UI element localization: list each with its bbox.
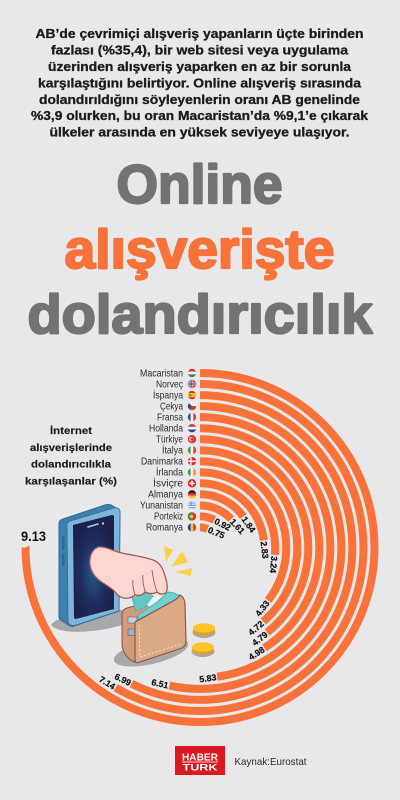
value labels: 2.83 bbox=[259, 541, 270, 559]
flag: Italy bbox=[188, 446, 196, 454]
intro text block: %3,9 olurken, bu oran Macaristan’da %9,1’e çıkarak bbox=[31, 109, 369, 123]
icon: wallet back and money bbox=[122, 592, 186, 662]
icon: sparkles bbox=[164, 546, 192, 576]
title bbox=[28, 153, 373, 345]
value labels: 6.99 bbox=[113, 671, 133, 688]
phone shadow bbox=[51, 609, 122, 632]
flag: Czechia bbox=[188, 402, 196, 410]
title: dolandırıcılık bbox=[28, 283, 373, 345]
country labels: Türkiye bbox=[156, 434, 183, 446]
country labels: İtalya bbox=[162, 446, 183, 456]
country labels: Hollanda bbox=[149, 423, 183, 434]
intro text block: fazlası (%35,4), bir web sitesi veya uygulama bbox=[51, 44, 349, 58]
title: Online bbox=[116, 153, 282, 215]
country labels: Portekiz bbox=[154, 512, 183, 523]
flag: Spain bbox=[188, 390, 196, 400]
radial bar chart bbox=[26, 373, 374, 722]
country labels: Macaristan bbox=[140, 368, 183, 379]
intro text block: ülkeler arasında en yüksek seviyeye ulaşıyor. bbox=[50, 126, 350, 140]
flag: France bbox=[188, 413, 196, 422]
flag: Greece bbox=[188, 501, 196, 510]
logo: Haber Türk: HABER bbox=[182, 752, 219, 764]
country labels bbox=[140, 368, 184, 534]
country labels: Yunanistan bbox=[140, 501, 183, 512]
value labels: 1.61 bbox=[228, 517, 247, 536]
title: alışverişte bbox=[64, 218, 334, 280]
flag: Hungary bbox=[188, 368, 196, 378]
flags bbox=[188, 368, 196, 532]
value labels: 7.14 bbox=[97, 674, 117, 692]
top value 9.13: 9.13 bbox=[21, 528, 46, 544]
country labels: Fransa bbox=[157, 412, 183, 423]
chart caption: İnternet bbox=[50, 424, 93, 437]
chart caption: alışverişlerinde bbox=[30, 443, 112, 454]
value labels: 0.92 bbox=[213, 516, 233, 533]
icon: phone bbox=[59, 504, 120, 626]
value labels: 3.24 bbox=[268, 556, 279, 574]
flag: Switzerland bbox=[188, 479, 196, 488]
value labels: 4.72 bbox=[246, 619, 266, 637]
source: Kaynak:Eurostat bbox=[234, 756, 307, 768]
logo: Haber Türk bbox=[175, 746, 225, 775]
value labels bbox=[97, 515, 279, 692]
chart caption: dolandırıcılıkla bbox=[31, 460, 111, 470]
value labels: 1.84 bbox=[240, 515, 258, 534]
illustration: phone and wallet bbox=[51, 504, 216, 672]
intro text block: üzerinden alışveriş yaparken en az bir sorunla bbox=[48, 60, 352, 74]
country labels: İsviçre bbox=[153, 479, 184, 490]
country labels: İspanya bbox=[153, 390, 183, 401]
flag: Portugal bbox=[188, 512, 196, 521]
intro text block: AB’de çevrimiçi alışveriş yapanların üçte birinden bbox=[36, 27, 364, 41]
value labels: 0.75 bbox=[207, 525, 226, 541]
value labels: 4.79 bbox=[250, 629, 270, 648]
country labels: Almanya bbox=[148, 490, 183, 501]
icon: wallet front bbox=[135, 592, 186, 663]
country labels: İrlanda bbox=[156, 468, 183, 479]
flag: Romania bbox=[188, 523, 196, 532]
flag: Norway bbox=[188, 380, 196, 388]
country labels: Çekya bbox=[160, 401, 183, 412]
country labels: Danimarka bbox=[141, 456, 183, 468]
country labels: Romanya bbox=[146, 523, 183, 534]
intro text block bbox=[31, 27, 369, 140]
chart caption: karşılaşanlar (%) bbox=[25, 476, 117, 488]
intro text block: dolandırıldığını söyleyenlerin oranı AB genelinde bbox=[39, 93, 360, 107]
intro text block: karşılaştığını belirtiyor. Online alışveriş sırasında bbox=[38, 76, 362, 90]
value labels: 4.33 bbox=[253, 598, 272, 618]
flag: Ireland bbox=[188, 468, 196, 476]
value labels: 6.51 bbox=[151, 677, 170, 691]
country labels: Norveç bbox=[156, 379, 183, 390]
logo: Haber Türk: TURK bbox=[182, 762, 218, 772]
icon: hand bbox=[90, 547, 167, 598]
value labels: 5.83 bbox=[199, 672, 217, 684]
icon: coins bbox=[192, 623, 216, 657]
flag: Germany bbox=[188, 490, 196, 498]
flag: Turkey bbox=[188, 435, 196, 444]
flag: Netherlands bbox=[188, 424, 196, 432]
chart caption bbox=[25, 424, 117, 488]
flag: Denmark bbox=[188, 457, 196, 466]
value labels: 4.98 bbox=[247, 644, 267, 662]
wallet shadow bbox=[111, 632, 191, 672]
